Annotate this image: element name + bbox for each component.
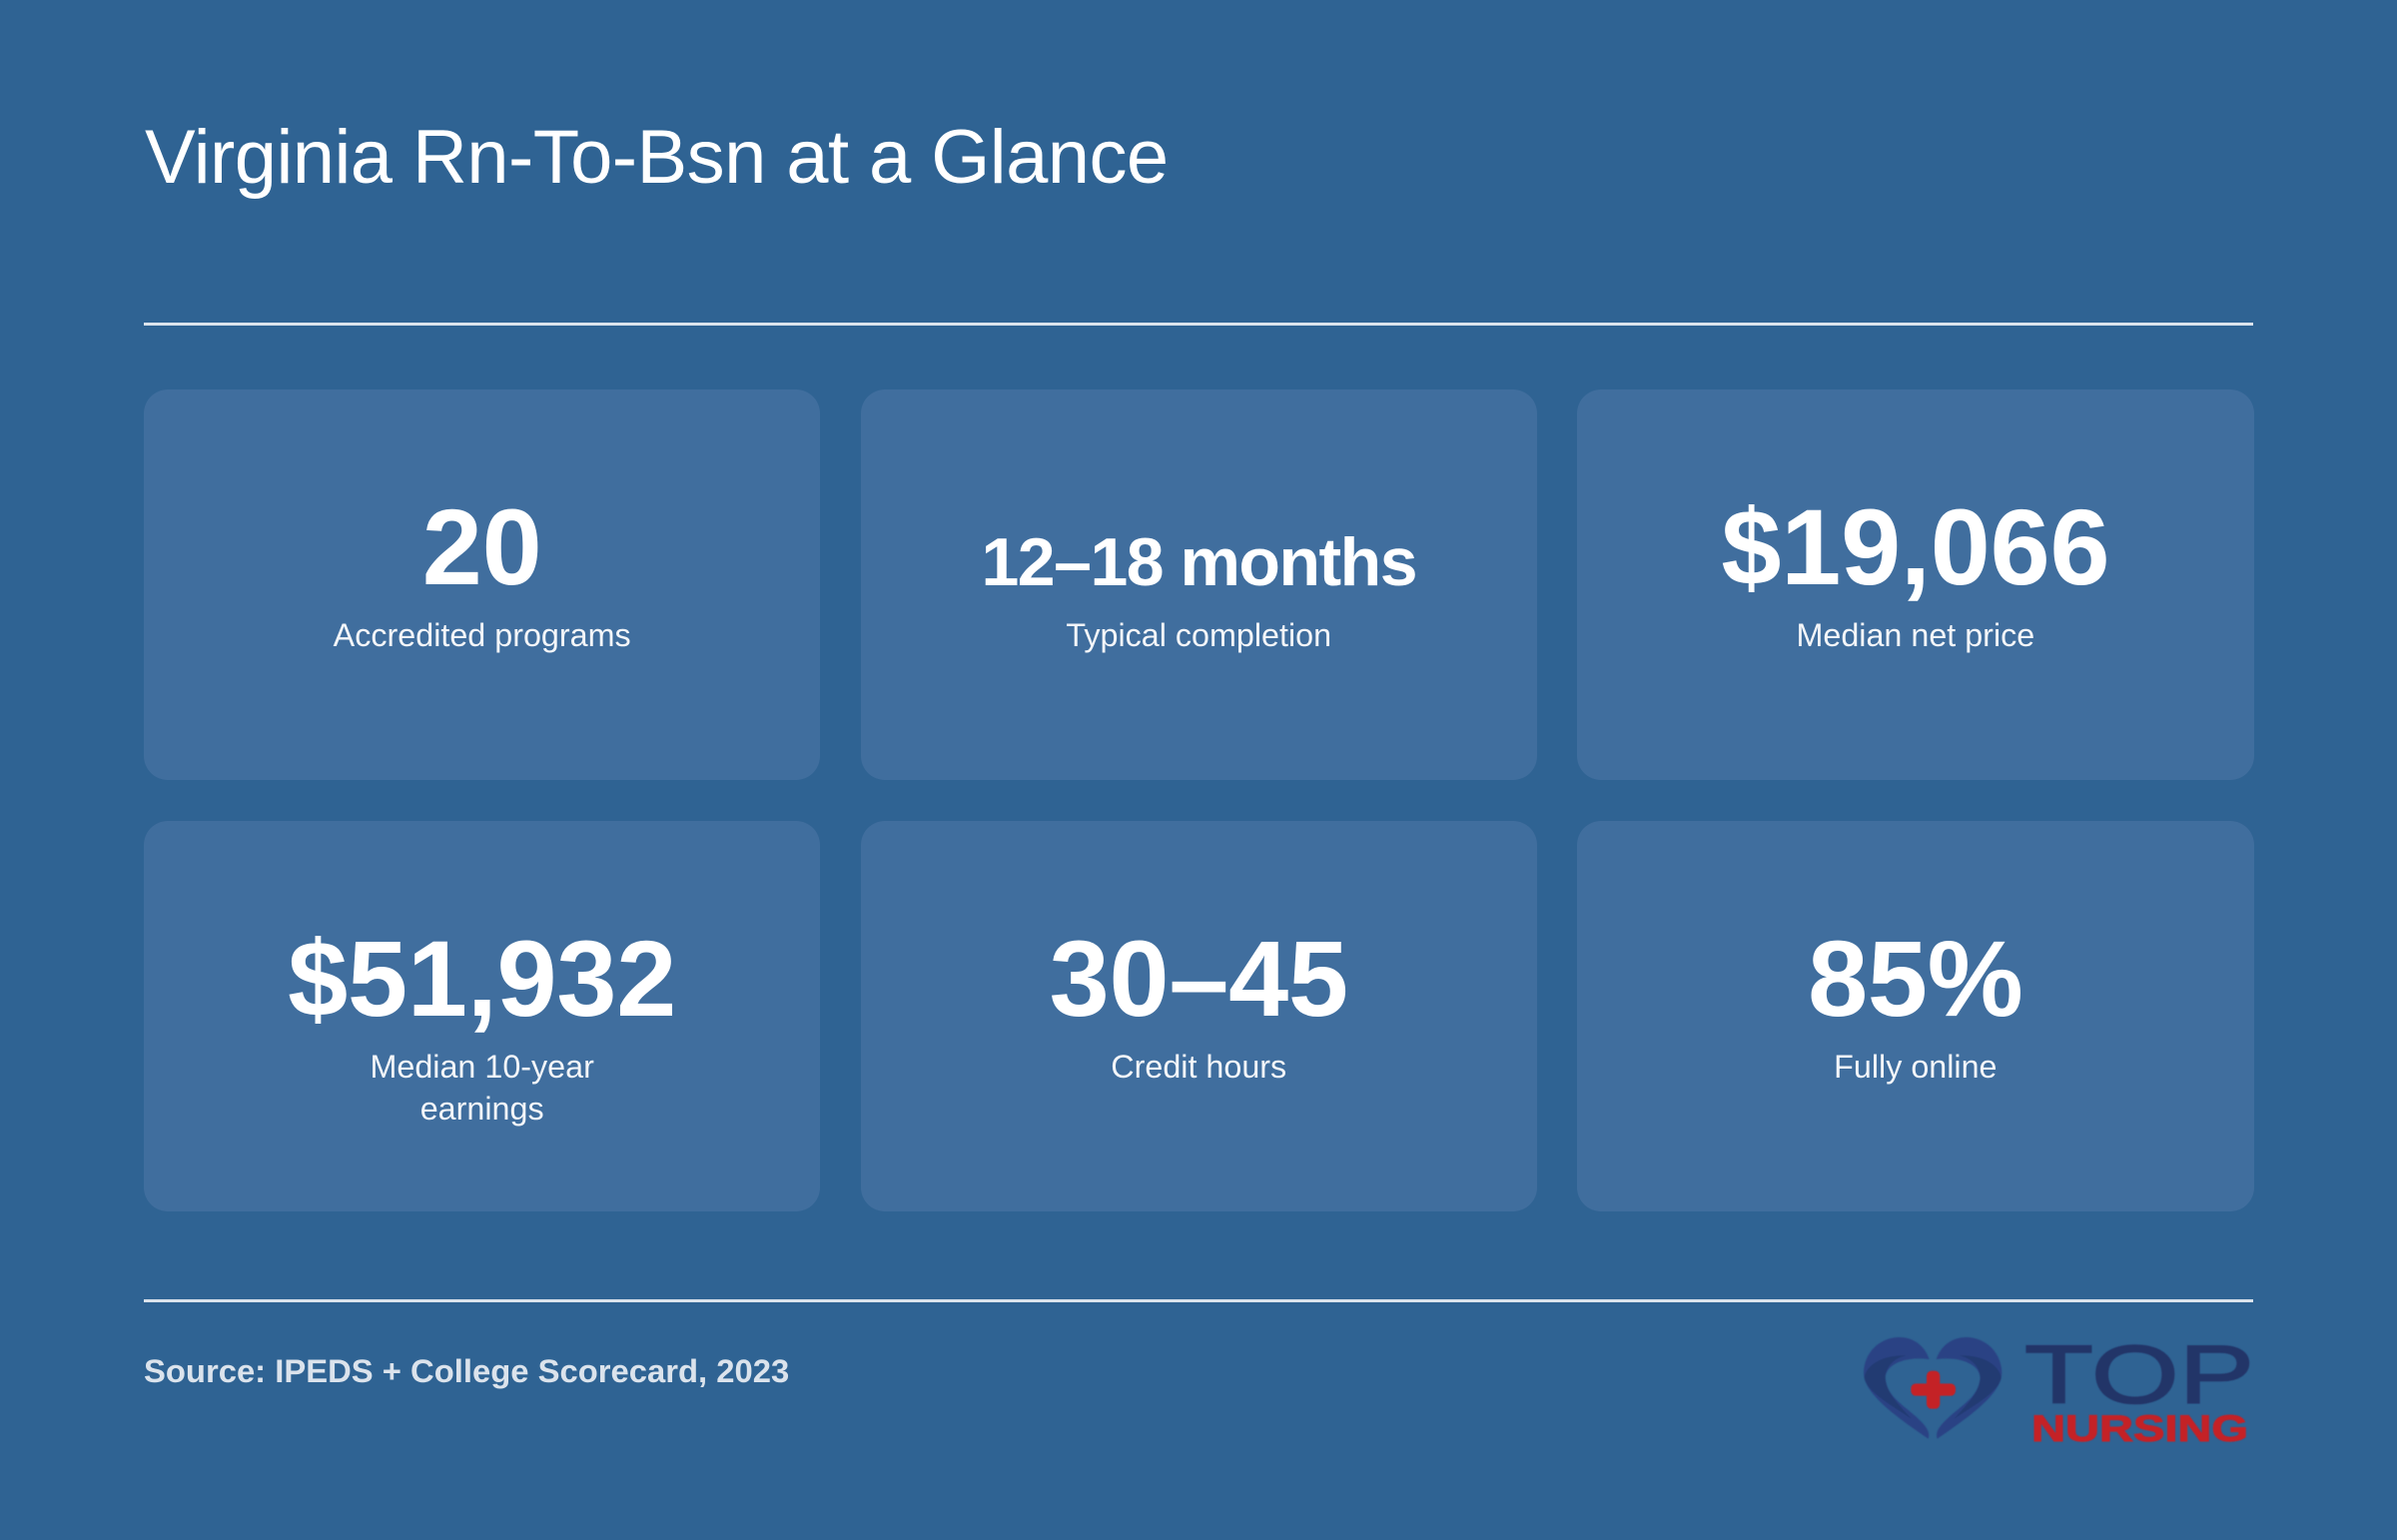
source note: Source: IPEDS + College Scorecard, 2023 <box>144 1352 789 1388</box>
panel: accredited programs <box>144 389 820 779</box>
icon: heart with cross <box>1864 1337 2001 1439</box>
stat value: 20: 20 <box>422 486 542 607</box>
stat label: median 10-year earnings <box>370 1049 594 1127</box>
stat label: median net price: Median net price <box>1796 617 2034 653</box>
stat value: 12–18 months: 12–18 months <box>981 523 1416 599</box>
stat value: 30–45: 30–45 <box>1050 918 1348 1039</box>
stat label: median 10-year earnings: earnings <box>420 1091 544 1127</box>
title: Virginia Rn-To-Bsn at a Glance <box>145 115 1169 200</box>
stat label: credit hours: Credit hours <box>1111 1049 1286 1085</box>
panel: fully online <box>1577 821 2254 1210</box>
stat label: typical completion: Typical completion <box>1066 617 1331 653</box>
panel: median net price <box>1577 389 2254 779</box>
panel: typical completion <box>861 389 1537 779</box>
panel: median earnings <box>144 821 820 1210</box>
logo wordmark: TOP: TOP <box>2024 1328 2254 1420</box>
stat value: 85%: 85% <box>1808 918 2023 1039</box>
stat label: median 10-year earnings: Median 10-year <box>370 1049 594 1085</box>
panel: credit hours <box>861 821 1537 1210</box>
stat value: $51,932: $51,932 <box>288 918 676 1039</box>
stat value: $19,066: $19,066 <box>1721 486 2109 607</box>
logo wordmark: NURSING: NURSING <box>2031 1408 2248 1449</box>
stat label: accredited programs: Accredited programs <box>334 617 631 653</box>
stat label: fully online: Fully online <box>1834 1049 1998 1085</box>
